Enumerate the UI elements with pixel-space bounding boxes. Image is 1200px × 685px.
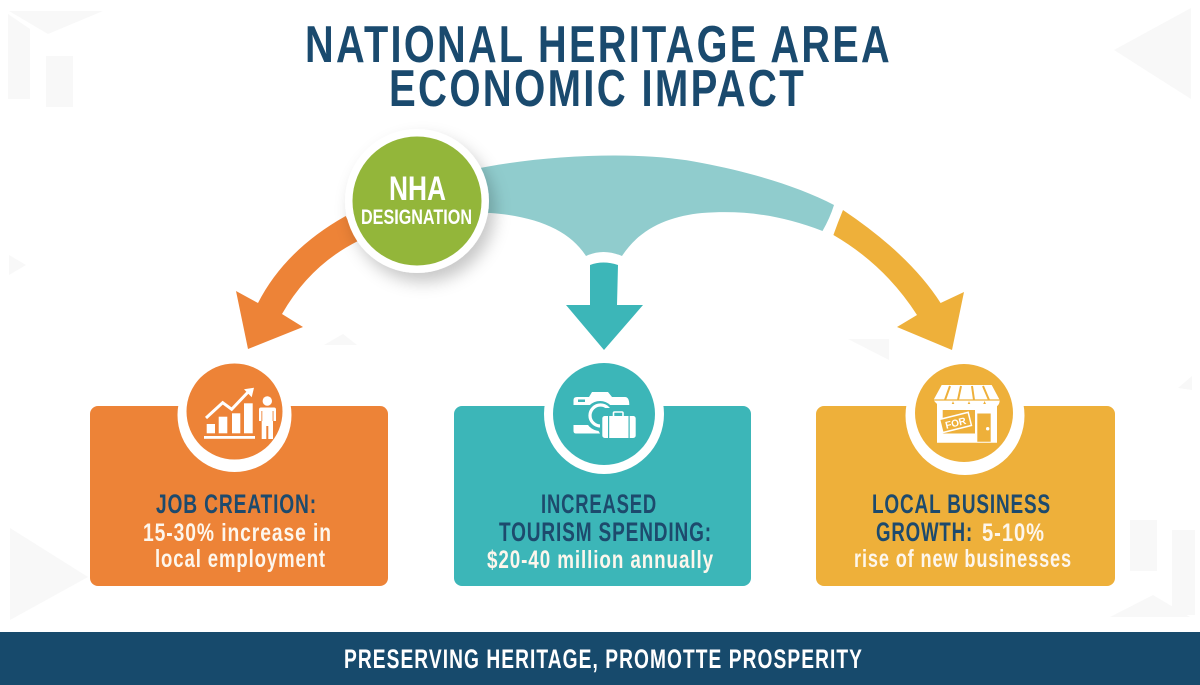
tourism spending text [487,489,714,574]
title [305,16,892,118]
NHA designation node [345,129,489,273]
footer banner [0,632,1200,685]
teal branching band [470,156,834,256]
NHA designation node: NHA [389,170,446,208]
icon: storefront with sale sign: FOR [944,416,968,432]
arrow: NHA designation to local business growth [833,210,964,350]
title: ECONOMIC IMPACT [389,60,806,118]
tourism spending text: TOURISM SPENDING: [499,517,712,547]
icon: camera and suitcase [574,392,638,440]
icon: storefront with sale sign [934,385,1000,443]
tourism spending text: $20-40 million annually [487,546,714,574]
job creation text: 15-30% increase in [143,519,332,547]
footer banner: PRESERVING HERITAGE, PROMOTTE PROSPERITY [344,644,863,674]
icon: growth chart and person [204,388,276,439]
job creation text [143,489,332,573]
job creation text: JOB CREATION: [156,489,317,519]
tourism spending text: INCREASED [541,489,657,519]
title: NATIONAL HERITAGE AREA [305,16,892,74]
NHA designation node: DESIGNATION [361,206,472,229]
job creation text: local employment [155,545,326,573]
panel: job creation [90,358,388,586]
panel: tourism spending [454,354,751,586]
local business growth text: GROWTH: [876,517,973,547]
local business growth text: 5-10% [982,519,1045,547]
local business growth text [854,489,1072,573]
arrow: NHA designation to job creation [236,216,358,349]
local business growth text: LOCAL BUSINESS [872,489,1051,519]
local business growth text: rise of new businesses [854,545,1072,573]
panel: local business growth [816,356,1115,586]
arrow: down to tourism spending [566,262,643,350]
